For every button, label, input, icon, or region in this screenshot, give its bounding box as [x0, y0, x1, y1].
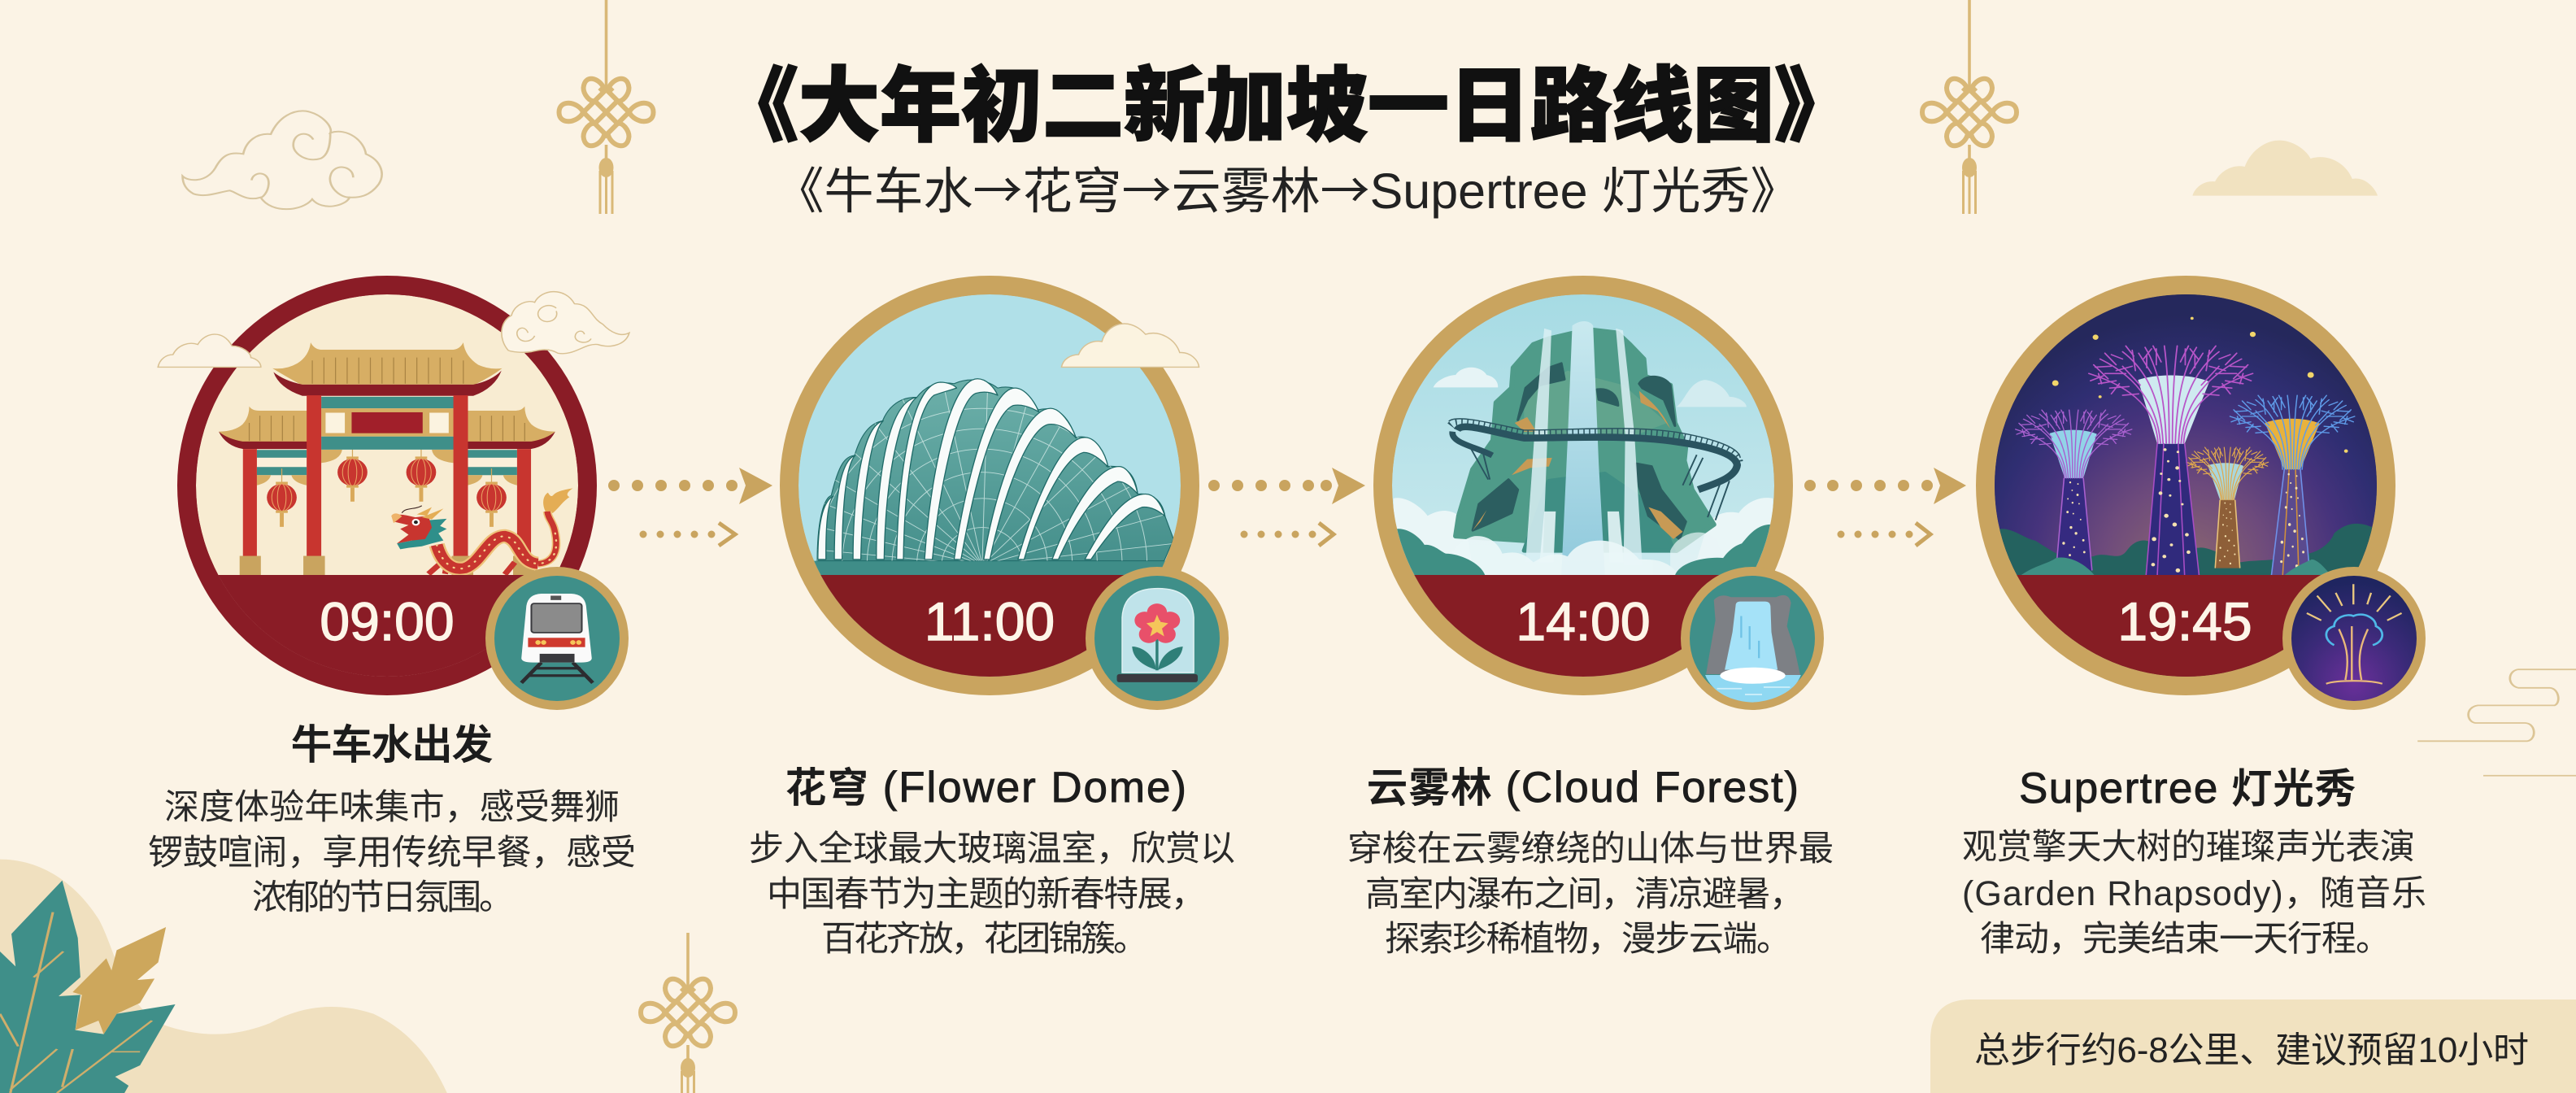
stop 4: Supertree	[1968, 276, 2426, 710]
caption title: 牛车水出发	[291, 722, 493, 768]
decoration: Chinese knot bottom	[641, 933, 735, 1093]
scene: supertrees at night	[1995, 294, 2377, 677]
caption body: 浓郁的节日氛围。	[252, 878, 514, 917]
caption body: 观赏擎天大树的璀璨声光表演	[1962, 828, 2415, 867]
caption title: 云雾林 (Cloud Forest)	[1367, 764, 1799, 812]
caption title: 花穹 (Flower Dome)	[785, 764, 1186, 812]
scene: dome	[798, 294, 1181, 677]
time: 14:00	[1516, 591, 1651, 651]
caption body	[1962, 828, 2426, 959]
time: 11:00	[925, 591, 1055, 651]
title: 《大年初二新加坡一日路线图》	[717, 61, 1856, 152]
stop 3 caption	[1347, 764, 1834, 959]
scene: gate with dragon	[196, 294, 578, 677]
caption body: 锣鼓喧闹，享用传统早餐，感受	[148, 834, 636, 873]
route arrow 2	[1208, 468, 1365, 546]
subtitle: 《牛车水→花穹→云雾林→Supertree 灯光秀》	[775, 150, 1799, 223]
badge: flower in glass	[1086, 567, 1229, 710]
time: 09:00	[320, 591, 455, 651]
cloud right	[502, 292, 629, 354]
footer text: 总步行约6-8公里、建议预留10小时	[1974, 1030, 2529, 1070]
stop 2 caption	[749, 764, 1235, 959]
cloud	[1061, 324, 1199, 367]
decoration: solid cloud top-right	[2192, 141, 2378, 196]
caption body: (Garden Rhapsody)，随音乐	[1962, 874, 2426, 913]
route arrow 3	[1804, 468, 1966, 546]
ring	[780, 276, 1199, 695]
stop 2: Flower Dome	[780, 276, 1229, 722]
caption body	[148, 788, 636, 917]
decoration: scroll lines right	[2417, 669, 2576, 776]
ring	[1976, 276, 2395, 695]
badge: glowing tree	[2282, 567, 2426, 710]
scene: waterfall mountain	[1392, 294, 1774, 677]
decoration: line cloud top-left	[183, 111, 382, 209]
stop 1: Chinatown	[158, 276, 629, 710]
decoration: Chinese knot top-left	[559, 0, 654, 214]
caption body: 探索珍稀植物，漫步云端。	[1385, 920, 1791, 959]
caption body: 深度体验年味集市，感受舞狮	[164, 788, 620, 827]
time: 19:45	[2117, 591, 2252, 651]
stop 3: Cloud Forest	[1373, 276, 1824, 710]
caption body: 百花齐放，花团锦簇。	[821, 920, 1148, 959]
caption body: 律动，完美结束一天行程。	[1980, 920, 2391, 959]
ring	[177, 276, 597, 695]
stop 4 caption	[1962, 764, 2426, 959]
caption title: Supertree 灯光秀	[2019, 764, 2356, 812]
badge: waterfall	[1681, 567, 1824, 710]
decoration: Chinese knot top-right	[1922, 0, 2017, 214]
caption body	[1347, 830, 1834, 959]
caption body: 穿梭在云雾缭绕的山体与世界最	[1347, 830, 1834, 869]
caption body: 高室内瀑布之间，清凉避暑，	[1365, 875, 1804, 914]
cloud left	[158, 334, 261, 367]
decoration: bottom-left hills and leaves	[0, 860, 447, 1093]
ring	[1373, 276, 1793, 695]
caption body: 中国春节为主题的新春特展，	[767, 875, 1206, 914]
caption body: 步入全球最大玻璃温室，欣赏以	[749, 830, 1235, 869]
caption body	[749, 830, 1235, 959]
badge: train	[485, 567, 629, 710]
stop 1 caption	[148, 722, 636, 917]
footer note panel	[1930, 999, 2576, 1093]
route arrow 1	[608, 468, 772, 546]
